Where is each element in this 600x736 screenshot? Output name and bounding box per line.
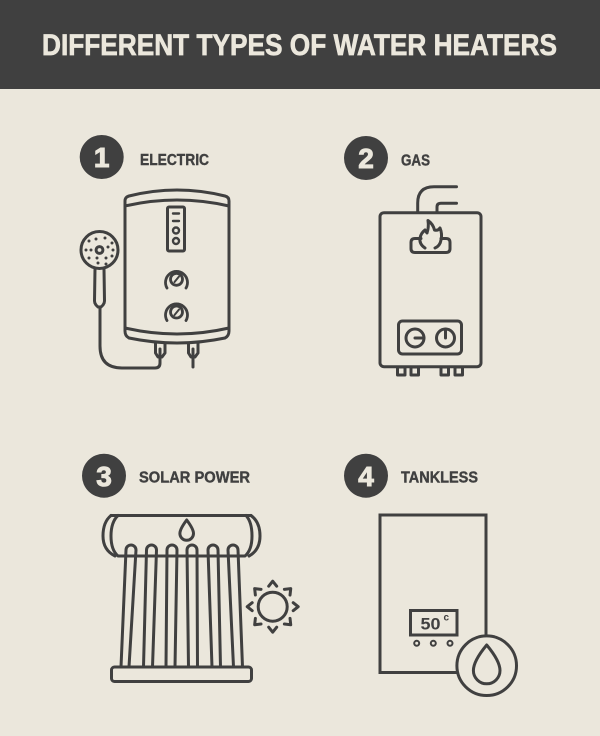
panel: tankless [344,454,516,696]
heading: tankless: TANKLESS [401,470,478,487]
number badge 2 [344,136,388,180]
heading: electric: ELECTRIC [140,152,209,169]
icon: tankless water heater: 50 [420,614,440,634]
heading: gas: GAS [401,152,430,170]
icon: gas water heater [380,187,481,375]
panel: gas [344,136,481,375]
heading: solar power: SOLAR POWER [139,470,250,487]
number badge 3: 3 [96,461,112,492]
header banner [0,0,600,89]
panel: electric [80,135,229,368]
number badge 1 [80,135,124,179]
icon: tankless water heater [380,515,516,696]
icon: solar water heater [103,516,260,682]
number badge 1: 1 [94,142,109,173]
number badge 4 [344,454,388,498]
number badge 3 [82,454,126,498]
icon: electric water heater with shower [81,190,229,368]
number badge 2: 2 [358,143,374,174]
icon: sun [247,581,298,632]
number badge 4: 4 [358,461,374,492]
panel: solar power [82,454,298,682]
icon: tankless water heater: c [444,612,450,624]
